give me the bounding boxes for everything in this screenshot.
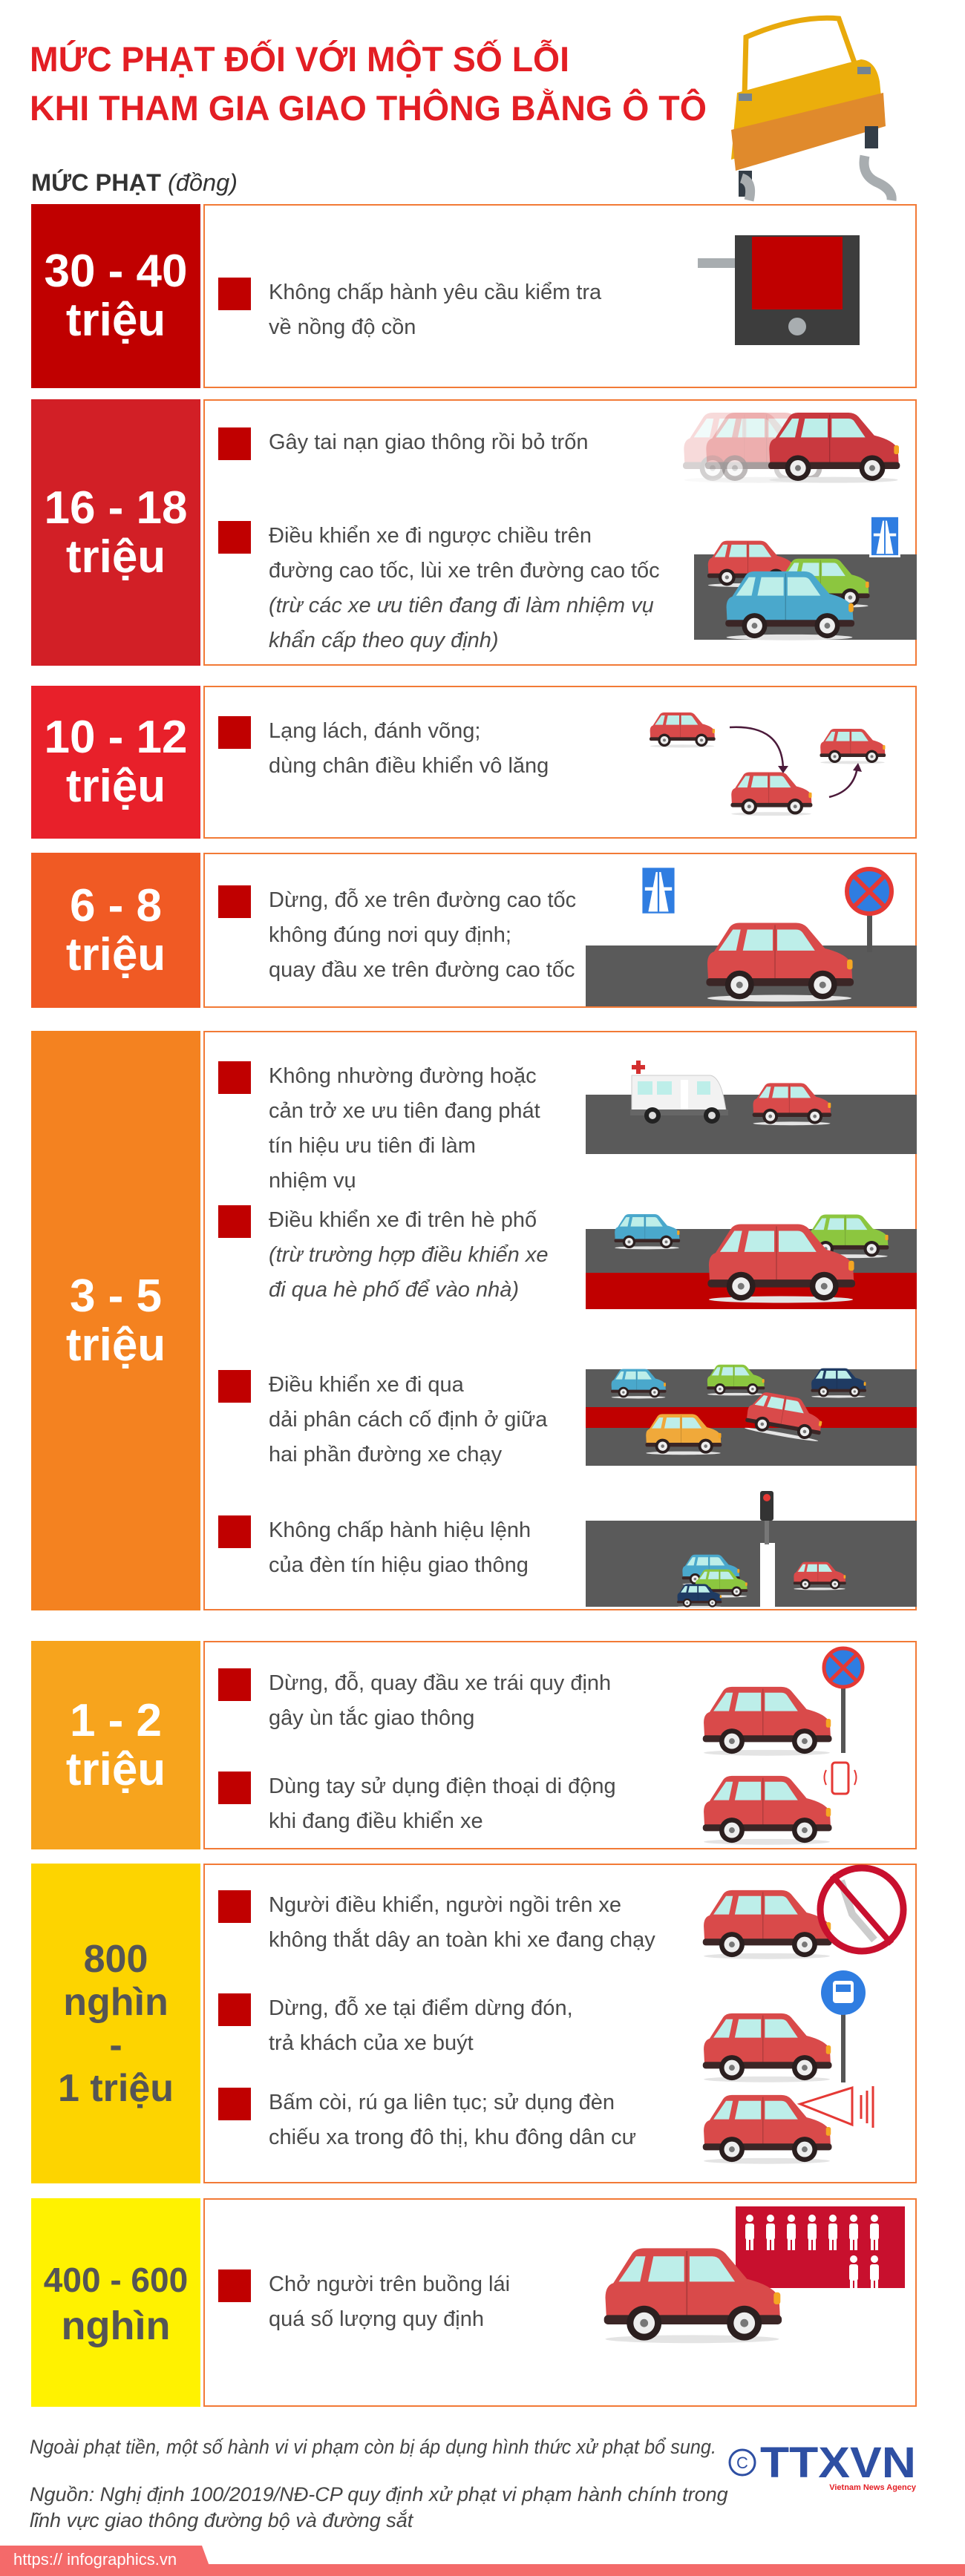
icon: yellow car front bbox=[731, 15, 897, 202]
panel: 400 - 600 nghìn bbox=[31, 2198, 917, 2407]
text 3 bbox=[269, 1373, 548, 1466]
text 2: khi đang điều khiển xe bbox=[269, 1809, 483, 1833]
text 2: Điều khiển xe đi trên hè phố bbox=[269, 1208, 537, 1232]
illustration: overloaded car bbox=[604, 2206, 905, 2344]
bullet 1 bbox=[218, 1061, 251, 1094]
text 1: nhiệm vụ bbox=[269, 1169, 356, 1193]
title bbox=[30, 39, 707, 128]
text 1: Không nhường đường hoặc bbox=[269, 1064, 537, 1088]
fine label bbox=[31, 399, 200, 666]
bullet 4 bbox=[218, 1515, 251, 1548]
text 2: đường cao tốc, lùi xe trên đường cao tốc bbox=[269, 559, 660, 583]
illustration: wrong way on highway bbox=[694, 517, 917, 640]
panel: 6 - 8 triệu bbox=[31, 853, 917, 1008]
text 2: (trừ trường hợp điều khiển xe bbox=[269, 1243, 548, 1267]
text bbox=[269, 281, 601, 339]
source: lĩnh vực giao thông đường bộ và đường sắt bbox=[30, 2509, 413, 2531]
illustration: hit and run car bbox=[683, 413, 900, 482]
fine label bbox=[31, 1864, 200, 2183]
bullet bbox=[218, 885, 251, 918]
text: Chở người trên buồng lái bbox=[269, 2272, 510, 2296]
fine label bbox=[31, 1641, 200, 1849]
fine label: 1 - 2 bbox=[70, 1695, 162, 1746]
subtitle: MỨC PHẠT (đồng): MỨC PHẠT (đồng) bbox=[31, 169, 238, 196]
text 2 bbox=[269, 1996, 573, 2055]
text 2: khẩn cấp theo quy định) bbox=[269, 629, 499, 652]
title: MỨC PHẠT ĐỐI VỚI MỘT SỐ LỖI bbox=[30, 39, 569, 79]
text 2: Điều khiển xe đi ngược chiều trên bbox=[269, 524, 592, 548]
fine label bbox=[31, 686, 200, 839]
footer bar bbox=[0, 2546, 965, 2576]
text 2: (trừ các xe ưu tiên đang đi làm nhiệm vụ bbox=[269, 594, 654, 617]
panel: 30 - 40 triệu bbox=[31, 204, 917, 388]
panel: 1 - 2 triệu bbox=[31, 1641, 917, 1849]
fine label: triệu bbox=[66, 1320, 166, 1370]
bullet 2 bbox=[218, 1772, 251, 1804]
text 2: trả khách của xe buýt bbox=[269, 2031, 474, 2055]
fine label: triệu bbox=[66, 761, 166, 812]
fine label: - bbox=[109, 2023, 122, 2066]
text 2: đi qua hè phố để vào nhà) bbox=[269, 1278, 519, 1302]
fine label: 16 - 18 bbox=[44, 482, 188, 533]
content box bbox=[203, 853, 917, 1008]
panel: 10 - 12 triệu bbox=[31, 686, 917, 839]
panel: 800 nghìn - 1 triệu bbox=[31, 1864, 917, 2183]
text 3: dải phân cách cố định ở giữa bbox=[269, 1408, 547, 1432]
text 1: cản trở xe ưu tiên đang phát bbox=[269, 1099, 540, 1123]
fine label: triệu bbox=[66, 1744, 166, 1795]
illustration: driving on sidewalk bbox=[586, 1214, 917, 1309]
bullet 3 bbox=[218, 2088, 251, 2120]
fine label bbox=[31, 1031, 200, 1610]
logo: TTXVN: Vietnam News Agency bbox=[829, 2483, 917, 2492]
text 1: gây ùn tắc giao thông bbox=[269, 1706, 474, 1730]
fine label: triệu bbox=[66, 531, 166, 582]
fine label: triệu bbox=[66, 929, 166, 980]
fine label: 30 - 40 bbox=[44, 246, 188, 297]
text 3: Điều khiển xe đi qua bbox=[269, 1373, 464, 1397]
logo: TTXVN: TTXVN bbox=[760, 2439, 916, 2487]
illustration: seatbelt bbox=[702, 1864, 907, 1959]
text 1: Người điều khiển, người ngồi trên xe bbox=[269, 1893, 621, 1917]
bullet 1 bbox=[218, 1668, 251, 1701]
text 1 bbox=[269, 1893, 655, 1952]
panel: 16 - 18 triệu bbox=[31, 399, 917, 666]
fine label bbox=[31, 204, 200, 388]
text 2: Dừng, đỗ xe tại điểm dừng đón, bbox=[269, 1996, 573, 2020]
bullet bbox=[218, 278, 251, 310]
bullet 1 bbox=[218, 1890, 251, 1923]
illustration: crossing median bbox=[586, 1364, 917, 1466]
bullet bbox=[218, 716, 251, 749]
panel: 3 - 5 triệu bbox=[31, 1031, 917, 1610]
text 3: Bấm còi, rú ga liên tục; sử dụng đèn bbox=[269, 2091, 615, 2114]
text bbox=[269, 719, 549, 778]
bullet bbox=[218, 2269, 251, 2302]
text 1 bbox=[269, 1064, 540, 1193]
text: Không chấp hành yêu cầu kiểm tra bbox=[269, 281, 601, 304]
text 2: Dùng tay sử dụng điện thoại di động bbox=[269, 1774, 616, 1798]
text 2 bbox=[269, 524, 660, 652]
content box bbox=[203, 1031, 917, 1610]
content box bbox=[203, 399, 917, 666]
illustration: bus stop bbox=[702, 1970, 866, 2082]
text: Dừng, đỗ xe trên đường cao tốc bbox=[269, 888, 576, 912]
content box bbox=[203, 686, 917, 839]
fine label: 400 - 600 bbox=[44, 2261, 188, 2299]
text 1: Dừng, đỗ, quay đầu xe trái quy định bbox=[269, 1671, 611, 1695]
illustration: parked on highway bbox=[586, 867, 917, 1006]
logo: TTXVN bbox=[727, 2439, 920, 2492]
text 2 bbox=[269, 1208, 548, 1302]
fine label: triệu bbox=[66, 295, 166, 346]
content box bbox=[203, 204, 917, 388]
content box bbox=[203, 2198, 917, 2407]
text 2 bbox=[269, 1774, 616, 1833]
text 1 bbox=[269, 1671, 611, 1730]
bullet 2 bbox=[218, 521, 251, 554]
text 1: Gây tai nạn giao thông rồi bỏ trốn bbox=[269, 430, 588, 454]
illustration: red light bbox=[586, 1491, 917, 1607]
text 1: không thắt dây an toàn khi xe đang chạy bbox=[269, 1928, 655, 1952]
illustration: no parking car bbox=[702, 1646, 864, 1756]
text: Lạng lách, đánh võng; bbox=[269, 719, 480, 743]
illustration: phone use car bbox=[702, 1762, 857, 1845]
text bbox=[269, 888, 576, 982]
content box bbox=[203, 1641, 917, 1849]
text: không đúng nơi quy định; bbox=[269, 923, 511, 947]
source: Nguồn: Nghị định 100/2019/NĐ-CP quy định xử phạt vi phạm hành chính trong bbox=[30, 2483, 728, 2505]
text 4 bbox=[269, 1518, 531, 1577]
content box bbox=[203, 1864, 917, 2183]
logo: TTXVN: C bbox=[736, 2454, 748, 2472]
text 4: Không chấp hành hiệu lệnh bbox=[269, 1518, 531, 1542]
fine label: nghìn bbox=[63, 1980, 169, 2023]
text: dùng chân điều khiển vô lăng bbox=[269, 754, 549, 778]
url: https:// infographics.vn bbox=[13, 2550, 177, 2569]
text bbox=[269, 2272, 510, 2331]
fine label: 3 - 5 bbox=[70, 1271, 162, 1321]
bullet 2 bbox=[218, 1205, 251, 1238]
text 3 bbox=[269, 2091, 636, 2149]
bullet 3 bbox=[218, 1370, 251, 1403]
bullet 2 bbox=[218, 1993, 251, 2026]
illustration: weaving cars bbox=[650, 712, 886, 816]
illustration: ambulance bbox=[586, 1061, 917, 1154]
illustration: horn bbox=[702, 2086, 874, 2164]
bullet 1 bbox=[218, 427, 251, 460]
text: quay đầu xe trên đường cao tốc bbox=[269, 958, 575, 982]
fine label bbox=[31, 2198, 200, 2407]
text 1: tín hiệu ưu tiên đi làm bbox=[269, 1134, 476, 1158]
fine label bbox=[31, 853, 200, 1008]
text: về nồng độ cồn bbox=[269, 315, 416, 339]
source bbox=[30, 2482, 728, 2534]
title: KHI THAM GIA GIAO THÔNG BẰNG Ô TÔ bbox=[30, 88, 707, 128]
fine label: 6 - 8 bbox=[70, 880, 162, 931]
text 3: hai phần đường xe chạy bbox=[269, 1443, 502, 1466]
fine label: 800 bbox=[84, 1937, 148, 1980]
fine label: 10 - 12 bbox=[44, 712, 188, 763]
icon: breathalyzer bbox=[698, 235, 860, 345]
text 4: của đèn tín hiệu giao thông bbox=[269, 1553, 529, 1577]
text: quá số lượng quy định bbox=[269, 2307, 484, 2331]
text 3: chiếu xa trong đô thị, khu đông dân cư bbox=[269, 2126, 636, 2149]
fine label: nghìn bbox=[62, 2304, 170, 2348]
fine label: 1 triệu bbox=[58, 2066, 174, 2109]
